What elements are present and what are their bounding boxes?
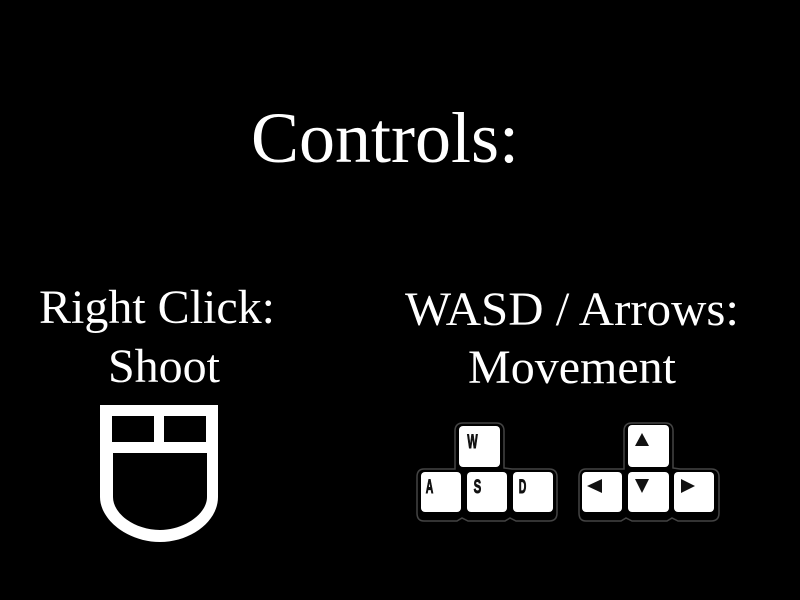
- icon: WASD keys: D: [519, 477, 526, 498]
- icon: WASD keys: [417, 423, 557, 521]
- icon: WASD keys: A: [426, 477, 433, 498]
- label: WASD arrows movement: WASD / Arrows:: [405, 283, 739, 336]
- label: right click shoot: Shoot: [108, 340, 221, 393]
- icon: mouse: [100, 405, 218, 542]
- icon: arrow keys: [579, 423, 719, 521]
- label: right click shoot: [39, 281, 275, 393]
- icon: WASD keys: W: [467, 432, 478, 453]
- icon: WASD keys: S: [474, 477, 481, 498]
- title: Controls:: [251, 98, 519, 178]
- label: WASD arrows movement: Movement: [468, 341, 677, 394]
- label: right click shoot: Right Click:: [39, 281, 275, 334]
- label: WASD arrows movement: [405, 283, 739, 394]
